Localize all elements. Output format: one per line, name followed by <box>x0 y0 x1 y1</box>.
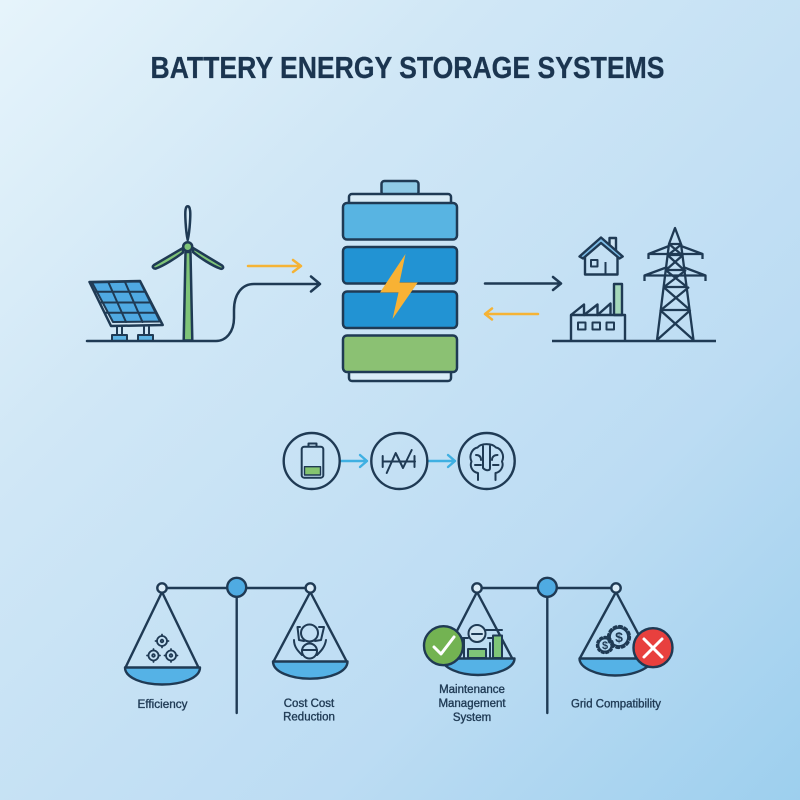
battery cell: blue upper <box>343 247 457 284</box>
battery cell: green <box>343 336 457 372</box>
battery <box>343 181 457 381</box>
dollar signs: $ <box>615 629 623 645</box>
icon: battery level <box>284 433 340 489</box>
battery top collar <box>349 194 451 206</box>
dollar signs: $ <box>602 640 608 652</box>
icon: factory <box>571 284 625 341</box>
icon: solar panel <box>90 281 163 341</box>
icon: cost figure <box>294 624 326 658</box>
arrow: battery to signal <box>341 455 367 467</box>
label: maintenance management system: System <box>453 712 491 724</box>
icon: signal waveform <box>371 433 427 489</box>
icon: red cross badge <box>634 628 672 667</box>
battery bottom collar <box>349 369 451 381</box>
icon: coin gears <box>597 626 630 653</box>
arrow: signal to brain <box>428 455 455 467</box>
arrow: orange charging arrow <box>248 260 301 272</box>
right pan: cost reduction <box>273 583 348 679</box>
battery cell: blue lower <box>343 292 457 328</box>
scale pole and beam <box>162 588 310 713</box>
arrow: output to loads <box>485 277 561 290</box>
energy sources: solar panel and wind turbine <box>87 206 320 341</box>
icon: manager with chart <box>462 625 502 658</box>
icon: lightning bolt <box>380 254 418 319</box>
battery cap <box>382 181 418 195</box>
title: BATTERY ENERGY STORAGE SYSTEMS <box>150 50 664 85</box>
icon: house <box>580 238 623 274</box>
label: maintenance management system: Management <box>438 698 506 710</box>
battery cell: light blue <box>343 203 457 240</box>
label: efficiency: Efficiency <box>138 699 188 711</box>
icon: green check badge <box>424 626 463 665</box>
pivot <box>538 578 557 597</box>
pivot <box>227 578 246 597</box>
label: cost reduction: Cost Cost <box>284 698 335 710</box>
power cable from sources to battery <box>87 276 320 341</box>
label: grid compatibility: Grid Compatibility <box>571 698 661 710</box>
label: maintenance management system: Maintenance <box>439 684 505 696</box>
ground line <box>552 340 716 342</box>
icon: brain head <box>459 433 515 489</box>
left pan: efficiency <box>125 583 200 684</box>
dollar signs <box>602 629 623 652</box>
icon: coin gears <box>147 634 178 662</box>
grid loads: house, factory, pylon <box>552 228 716 341</box>
right pan: grid compatibility <box>580 583 652 676</box>
arrow: orange return arrow <box>485 308 538 320</box>
icon: transmission tower <box>644 228 706 340</box>
balance scale: right <box>442 578 652 713</box>
icon: wind turbine <box>153 206 223 340</box>
label: cost reduction: Reduction <box>283 712 335 724</box>
process icons row <box>284 433 515 489</box>
left pan: maintenance <box>442 583 514 675</box>
balance scale: left <box>125 578 348 713</box>
scale pole and beam <box>477 588 616 713</box>
